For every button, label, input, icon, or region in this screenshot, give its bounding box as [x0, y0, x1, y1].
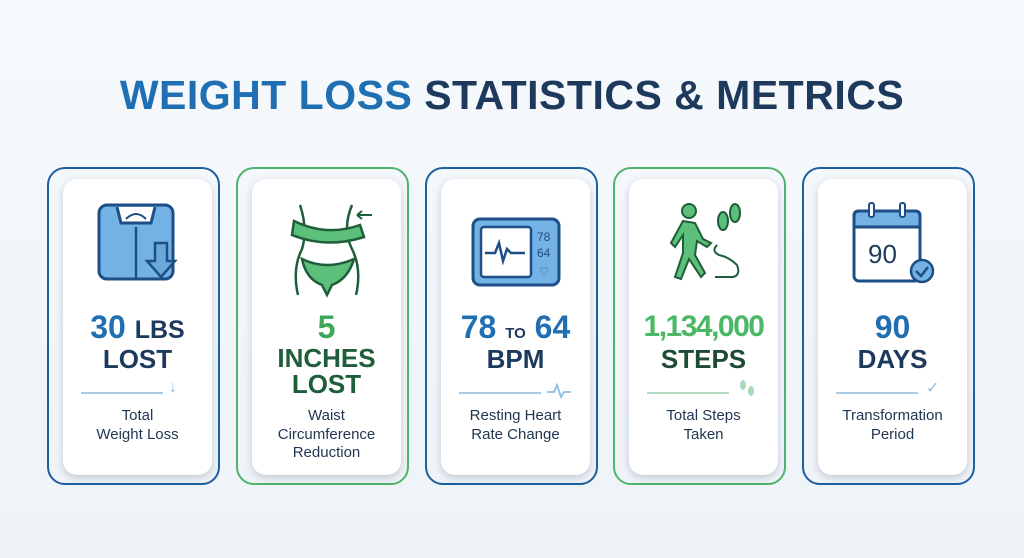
label: Transformation: [842, 407, 943, 424]
label: [842, 407, 943, 442]
label: Circumference: [278, 426, 375, 442]
panel: days: DAYS: [858, 344, 927, 374]
panel: heart rate: [425, 167, 598, 485]
panel: weight loss: LOST: [103, 344, 172, 374]
label: Rate Change: [471, 426, 560, 442]
number: 1,134,000: [644, 310, 763, 343]
icon: heart monitor: [472, 218, 560, 286]
icon: waist: [290, 204, 372, 298]
panel: steps: [613, 167, 786, 485]
panel: steps: STEPS: [661, 344, 746, 374]
label: [470, 407, 562, 442]
icon: heart monitor: 64: [537, 246, 551, 260]
panel: heart rate: BPM: [487, 344, 544, 374]
icon: walker: [670, 203, 741, 280]
panel: inches: INCHES: [277, 343, 376, 373]
label: [666, 407, 741, 442]
label: Taken: [683, 426, 724, 442]
number: 5: [318, 309, 335, 345]
icon: calendar: [852, 202, 934, 284]
panel: days: ✓: [926, 380, 939, 397]
label: [96, 407, 179, 442]
label: Waist: [308, 407, 345, 424]
icon: heart monitor: 78: [537, 230, 551, 244]
title: WEIGHT LOSS STATISTICS & METRICS: [120, 72, 904, 118]
icon: scale: [98, 204, 178, 280]
label: Total: [122, 407, 153, 424]
panel: inches: [236, 167, 409, 485]
label: Total Steps: [666, 407, 741, 424]
icon: heart monitor: ♡: [539, 266, 549, 278]
panel: days: [802, 167, 975, 485]
panel: inches: LOST: [292, 369, 361, 399]
panel: weight loss: [47, 167, 220, 485]
label: Weight Loss: [96, 426, 179, 442]
label: [278, 407, 375, 461]
icon: calendar: 90: [868, 239, 897, 269]
panel: weight loss: ↓: [169, 379, 177, 396]
label: Reduction: [293, 444, 360, 461]
label: Period: [871, 426, 914, 442]
number: 30 LBS: [90, 309, 185, 345]
number: 78 TO 64: [461, 309, 570, 345]
label: Resting Heart: [470, 407, 561, 424]
number: 90: [875, 309, 910, 345]
